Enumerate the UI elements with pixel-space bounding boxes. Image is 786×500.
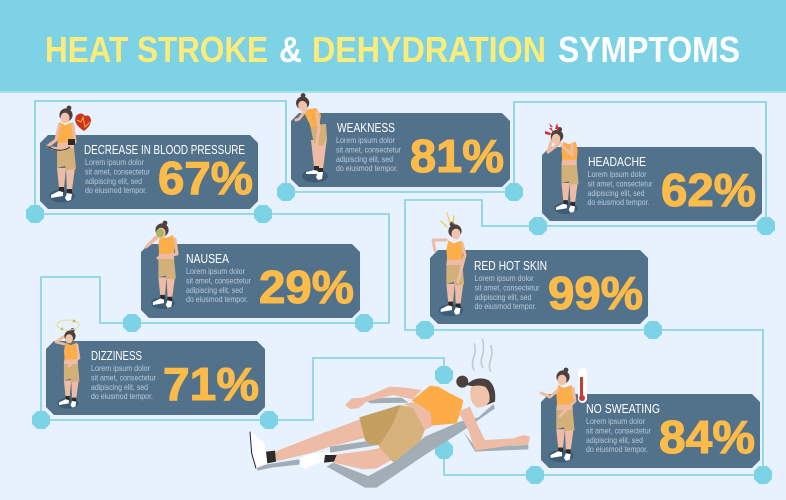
- description: do eiusmod tempor.: [588, 197, 650, 207]
- figure: woman feeling sick: [146, 221, 177, 309]
- figure: woman with raised elbow: [433, 222, 465, 316]
- description: sit amet, consectetur: [474, 282, 540, 292]
- icon: heart: [75, 114, 91, 131]
- title: &: [279, 29, 302, 70]
- connector nodes: [26, 183, 775, 484]
- panel: no sweating: [541, 368, 760, 468]
- description: [588, 169, 653, 207]
- description: [186, 266, 251, 304]
- description: sit amet, consectetur: [186, 276, 251, 286]
- description: sit amet, consectetur: [336, 144, 401, 154]
- description: adipiscing elit, sed: [588, 188, 645, 198]
- description: Lorem ipsum dolor: [336, 135, 395, 145]
- heading: WEAKNESS: [337, 121, 395, 135]
- description: [336, 135, 401, 173]
- figure: woman bending forward: [293, 92, 328, 182]
- panel: dizziness: [46, 320, 265, 415]
- percentage: 84%: [659, 411, 755, 463]
- description: adipiscing elit, sed: [336, 154, 393, 164]
- arms: [345, 387, 422, 409]
- description: adipiscing elit, sed: [91, 382, 148, 392]
- percentage: 29%: [259, 261, 354, 313]
- description: adipiscing elit, sed: [85, 176, 142, 186]
- description: Lorem ipsum dolor: [91, 363, 150, 373]
- description: [91, 363, 156, 401]
- heading: NAUSEA: [186, 252, 230, 266]
- heading: DECREASE IN BLOOD PRESSURE: [84, 143, 245, 157]
- percentage: 99%: [548, 267, 643, 319]
- figure: woman holding her head: [548, 127, 579, 214]
- description: Lorem ipsum dolor: [186, 266, 245, 276]
- title: SYMPTOMS: [558, 29, 740, 70]
- description: sit amet, consectetur: [85, 166, 150, 176]
- description: sit amet, consectetur: [586, 426, 651, 436]
- panel: weakness: [291, 92, 510, 187]
- green face tint: [156, 228, 164, 238]
- description: Lorem ipsum dolor: [474, 273, 534, 283]
- description: do eiusmod tempor.: [85, 185, 147, 195]
- figure: woman measuring blood pressure: [47, 106, 76, 202]
- title: HEAT STROKE: [45, 29, 268, 70]
- description: adipiscing elit, sed: [586, 435, 643, 445]
- percentage: 67%: [158, 152, 253, 204]
- title: DEHYDRATION: [312, 29, 546, 70]
- panel: red hot skin: [430, 213, 648, 324]
- icon: thermometer: [578, 368, 587, 403]
- description: do eiusmod tempor.: [474, 301, 536, 311]
- figure: dizzy woman: [56, 328, 79, 409]
- description: sit amet, consectetur: [91, 372, 156, 382]
- description: do eiusmod tempor.: [91, 391, 153, 401]
- heading: HEADACHE: [588, 155, 646, 169]
- heading: RED HOT SKIN: [474, 259, 547, 273]
- title: [45, 29, 740, 70]
- description: Lorem ipsum dolor: [85, 157, 144, 167]
- header banner: [0, 0, 786, 93]
- description: Lorem ipsum dolor: [588, 169, 647, 179]
- torso: [403, 402, 432, 430]
- shorts: [359, 405, 403, 445]
- ground shadow: [257, 404, 528, 488]
- description: sit amet, consectetur: [588, 178, 653, 188]
- heading: DIZZINESS: [91, 349, 142, 363]
- panel: decrease in blood pressure: [40, 106, 258, 209]
- percentage: 81%: [410, 130, 504, 182]
- description: do eiusmod tempor.: [586, 444, 648, 454]
- description: [474, 273, 540, 311]
- icon: pain bolts: [545, 123, 560, 135]
- head: [456, 376, 468, 388]
- description: adipiscing elit, sed: [186, 285, 243, 295]
- description: do eiusmod tempor.: [186, 294, 248, 304]
- heading: NO SWEATING: [586, 402, 660, 416]
- icon: heat rays: [441, 213, 454, 227]
- panel: nausea: [141, 221, 360, 318]
- illustration: collapsed woman: [250, 338, 530, 488]
- description: do eiusmod tempor.: [336, 163, 398, 173]
- connector lines: [35, 101, 766, 475]
- steam: [473, 338, 492, 372]
- figure: woman not sweating: [541, 368, 575, 462]
- panel: headache: [542, 123, 762, 221]
- percentage: 62%: [661, 164, 756, 216]
- legs: [275, 419, 370, 462]
- description: adipiscing elit, sed: [474, 292, 532, 302]
- description: [85, 157, 150, 195]
- icon: dizzy swirl: [57, 320, 79, 330]
- percentage: 71%: [163, 358, 259, 410]
- description: [586, 416, 651, 454]
- description: Lorem ipsum dolor: [586, 416, 645, 426]
